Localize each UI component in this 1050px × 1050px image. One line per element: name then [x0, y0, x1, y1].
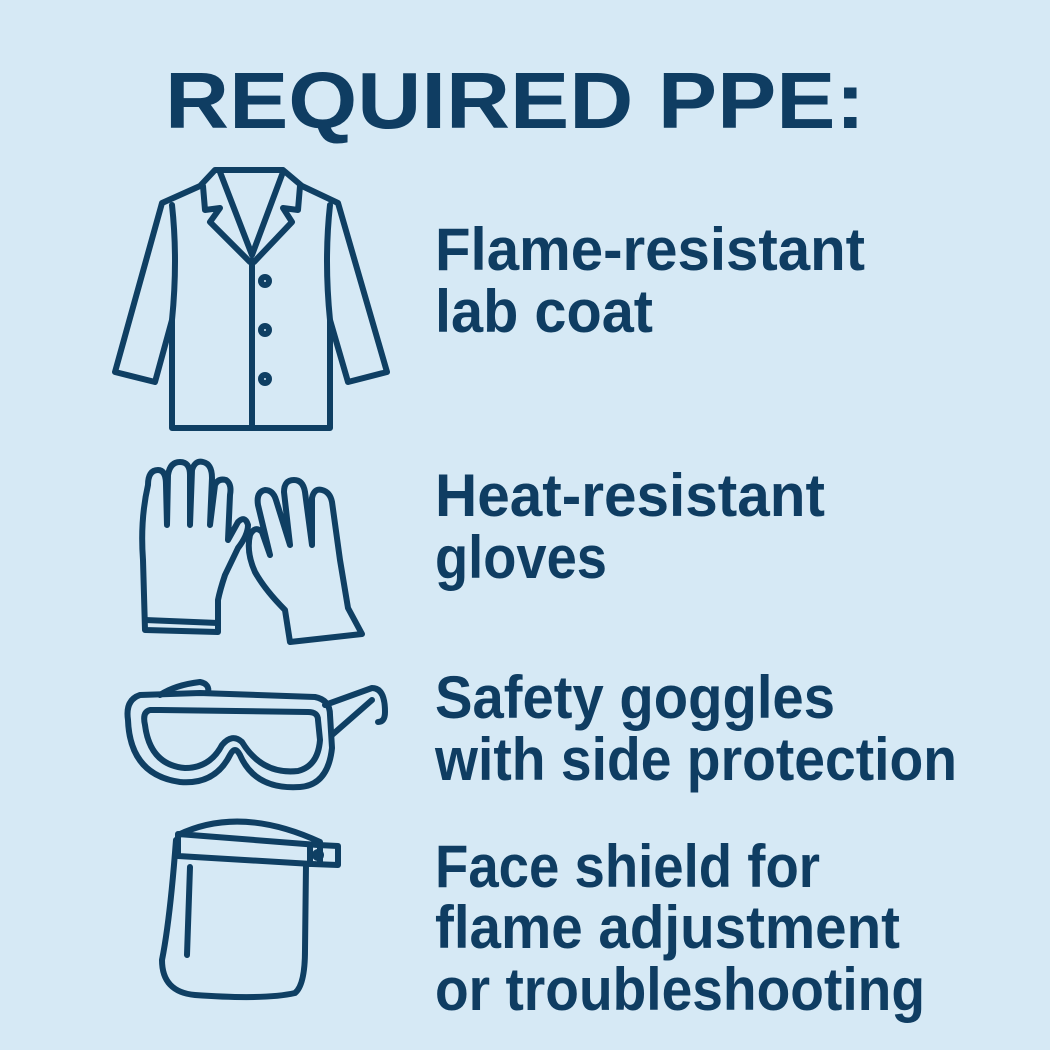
text: gloves: Heat-resistant — [435, 462, 825, 529]
icon: lab coat — [115, 170, 387, 428]
text: goggles: with side protection — [434, 726, 957, 793]
text: gloves: gloves — [435, 524, 607, 591]
text: goggles — [434, 664, 957, 793]
icon: gloves — [142, 462, 362, 642]
text: lab coat: lab coat — [435, 278, 653, 345]
title: REQUIRED PPE: — [165, 56, 865, 145]
text: goggles: Safety goggles — [435, 664, 835, 731]
text: lab coat: Flame-resistant — [435, 216, 865, 283]
text: gloves — [435, 462, 825, 591]
icon: goggles — [128, 682, 385, 787]
icon: face shield — [162, 822, 338, 997]
text: face shield — [435, 833, 925, 1023]
text: face shield: or troubleshooting — [435, 956, 925, 1023]
text: lab coat — [435, 216, 865, 345]
text: face shield: flame adjustment — [435, 894, 900, 961]
text: face shield: Face shield for — [435, 833, 820, 900]
